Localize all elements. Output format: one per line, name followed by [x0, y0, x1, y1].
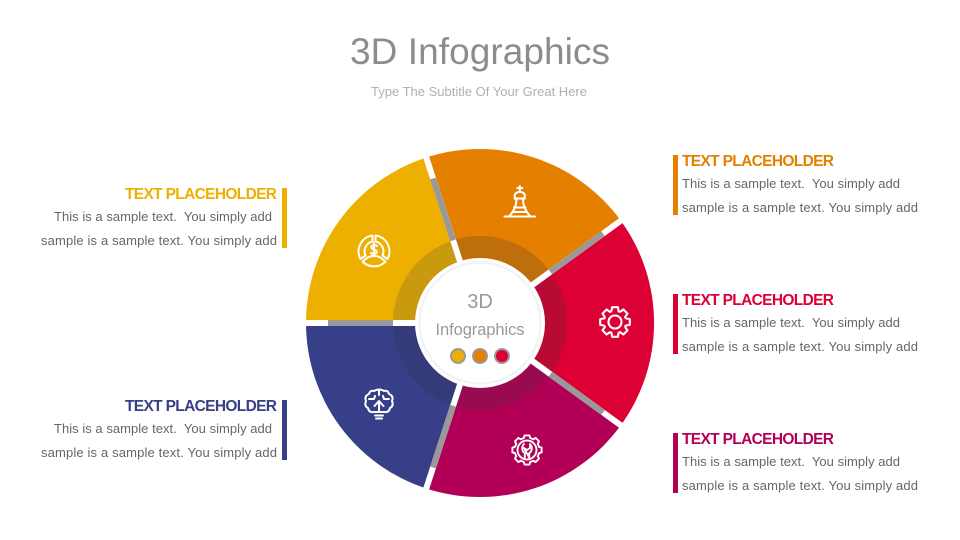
body text: This is a sample text. You simply add — [54, 421, 272, 436]
center circle: Infographics — [436, 321, 524, 339]
icon: brain bulb — [365, 390, 393, 418]
text block: navy — [41, 398, 287, 460]
text block: yellow — [41, 186, 287, 248]
inner ring: yellow — [393, 240, 480, 323]
icon: dollar target — [359, 236, 389, 266]
icon: gear — [600, 307, 630, 337]
inner ring: magenta — [453, 323, 550, 410]
text block: red — [673, 292, 918, 354]
subtitle: Type The Subtitle Of Your Great Here — [371, 84, 587, 99]
accent bar — [673, 433, 678, 493]
inner ring: red — [480, 272, 567, 374]
text block: yellow: sample is a sample text. You simply add — [41, 233, 277, 248]
segment: navy — [306, 323, 480, 488]
heading: TEXT PLACEHOLDER — [682, 431, 834, 448]
text block: red: sample is a sample text. You simply add — [682, 339, 918, 354]
body text: This is a sample text. You simply add — [682, 315, 900, 330]
text block: navy: sample is a sample text. You simply add — [41, 445, 277, 460]
center label: 3D — [467, 291, 493, 313]
donut chart — [300, 149, 654, 497]
text block: magenta — [673, 431, 918, 493]
text block: orange — [673, 153, 918, 215]
title: 3D Infographics — [350, 31, 610, 72]
text block: magenta: sample is a sample text. You simply add — [682, 478, 918, 493]
center circle — [415, 258, 545, 388]
accent bar — [282, 188, 287, 248]
heading: TEXT PLACEHOLDER — [682, 292, 834, 309]
center dots — [451, 349, 509, 363]
accent bar — [282, 400, 287, 460]
heading: TEXT PLACEHOLDER — [682, 153, 834, 170]
heading: TEXT PLACEHOLDER — [125, 186, 277, 203]
heading: TEXT PLACEHOLDER — [125, 398, 277, 415]
segment: red — [480, 221, 654, 425]
inner ring: orange — [453, 236, 550, 323]
body text: This is a sample text. You simply add — [54, 209, 272, 224]
text block: orange: sample is a sample text. You simply add — [682, 200, 918, 215]
segment: orange — [426, 149, 621, 323]
segment: yellow — [306, 158, 480, 323]
icon: wrench gear — [512, 435, 542, 465]
body text: This is a sample text. You simply add — [682, 454, 900, 469]
segment: magenta — [426, 323, 621, 497]
icon: chess king — [504, 186, 535, 216]
body text: This is a sample text. You simply add — [682, 176, 900, 191]
inner ring: navy — [393, 323, 480, 406]
grey separator inserts — [328, 178, 603, 468]
white separators — [300, 152, 626, 494]
accent bar — [673, 155, 678, 215]
accent bar — [673, 294, 678, 354]
